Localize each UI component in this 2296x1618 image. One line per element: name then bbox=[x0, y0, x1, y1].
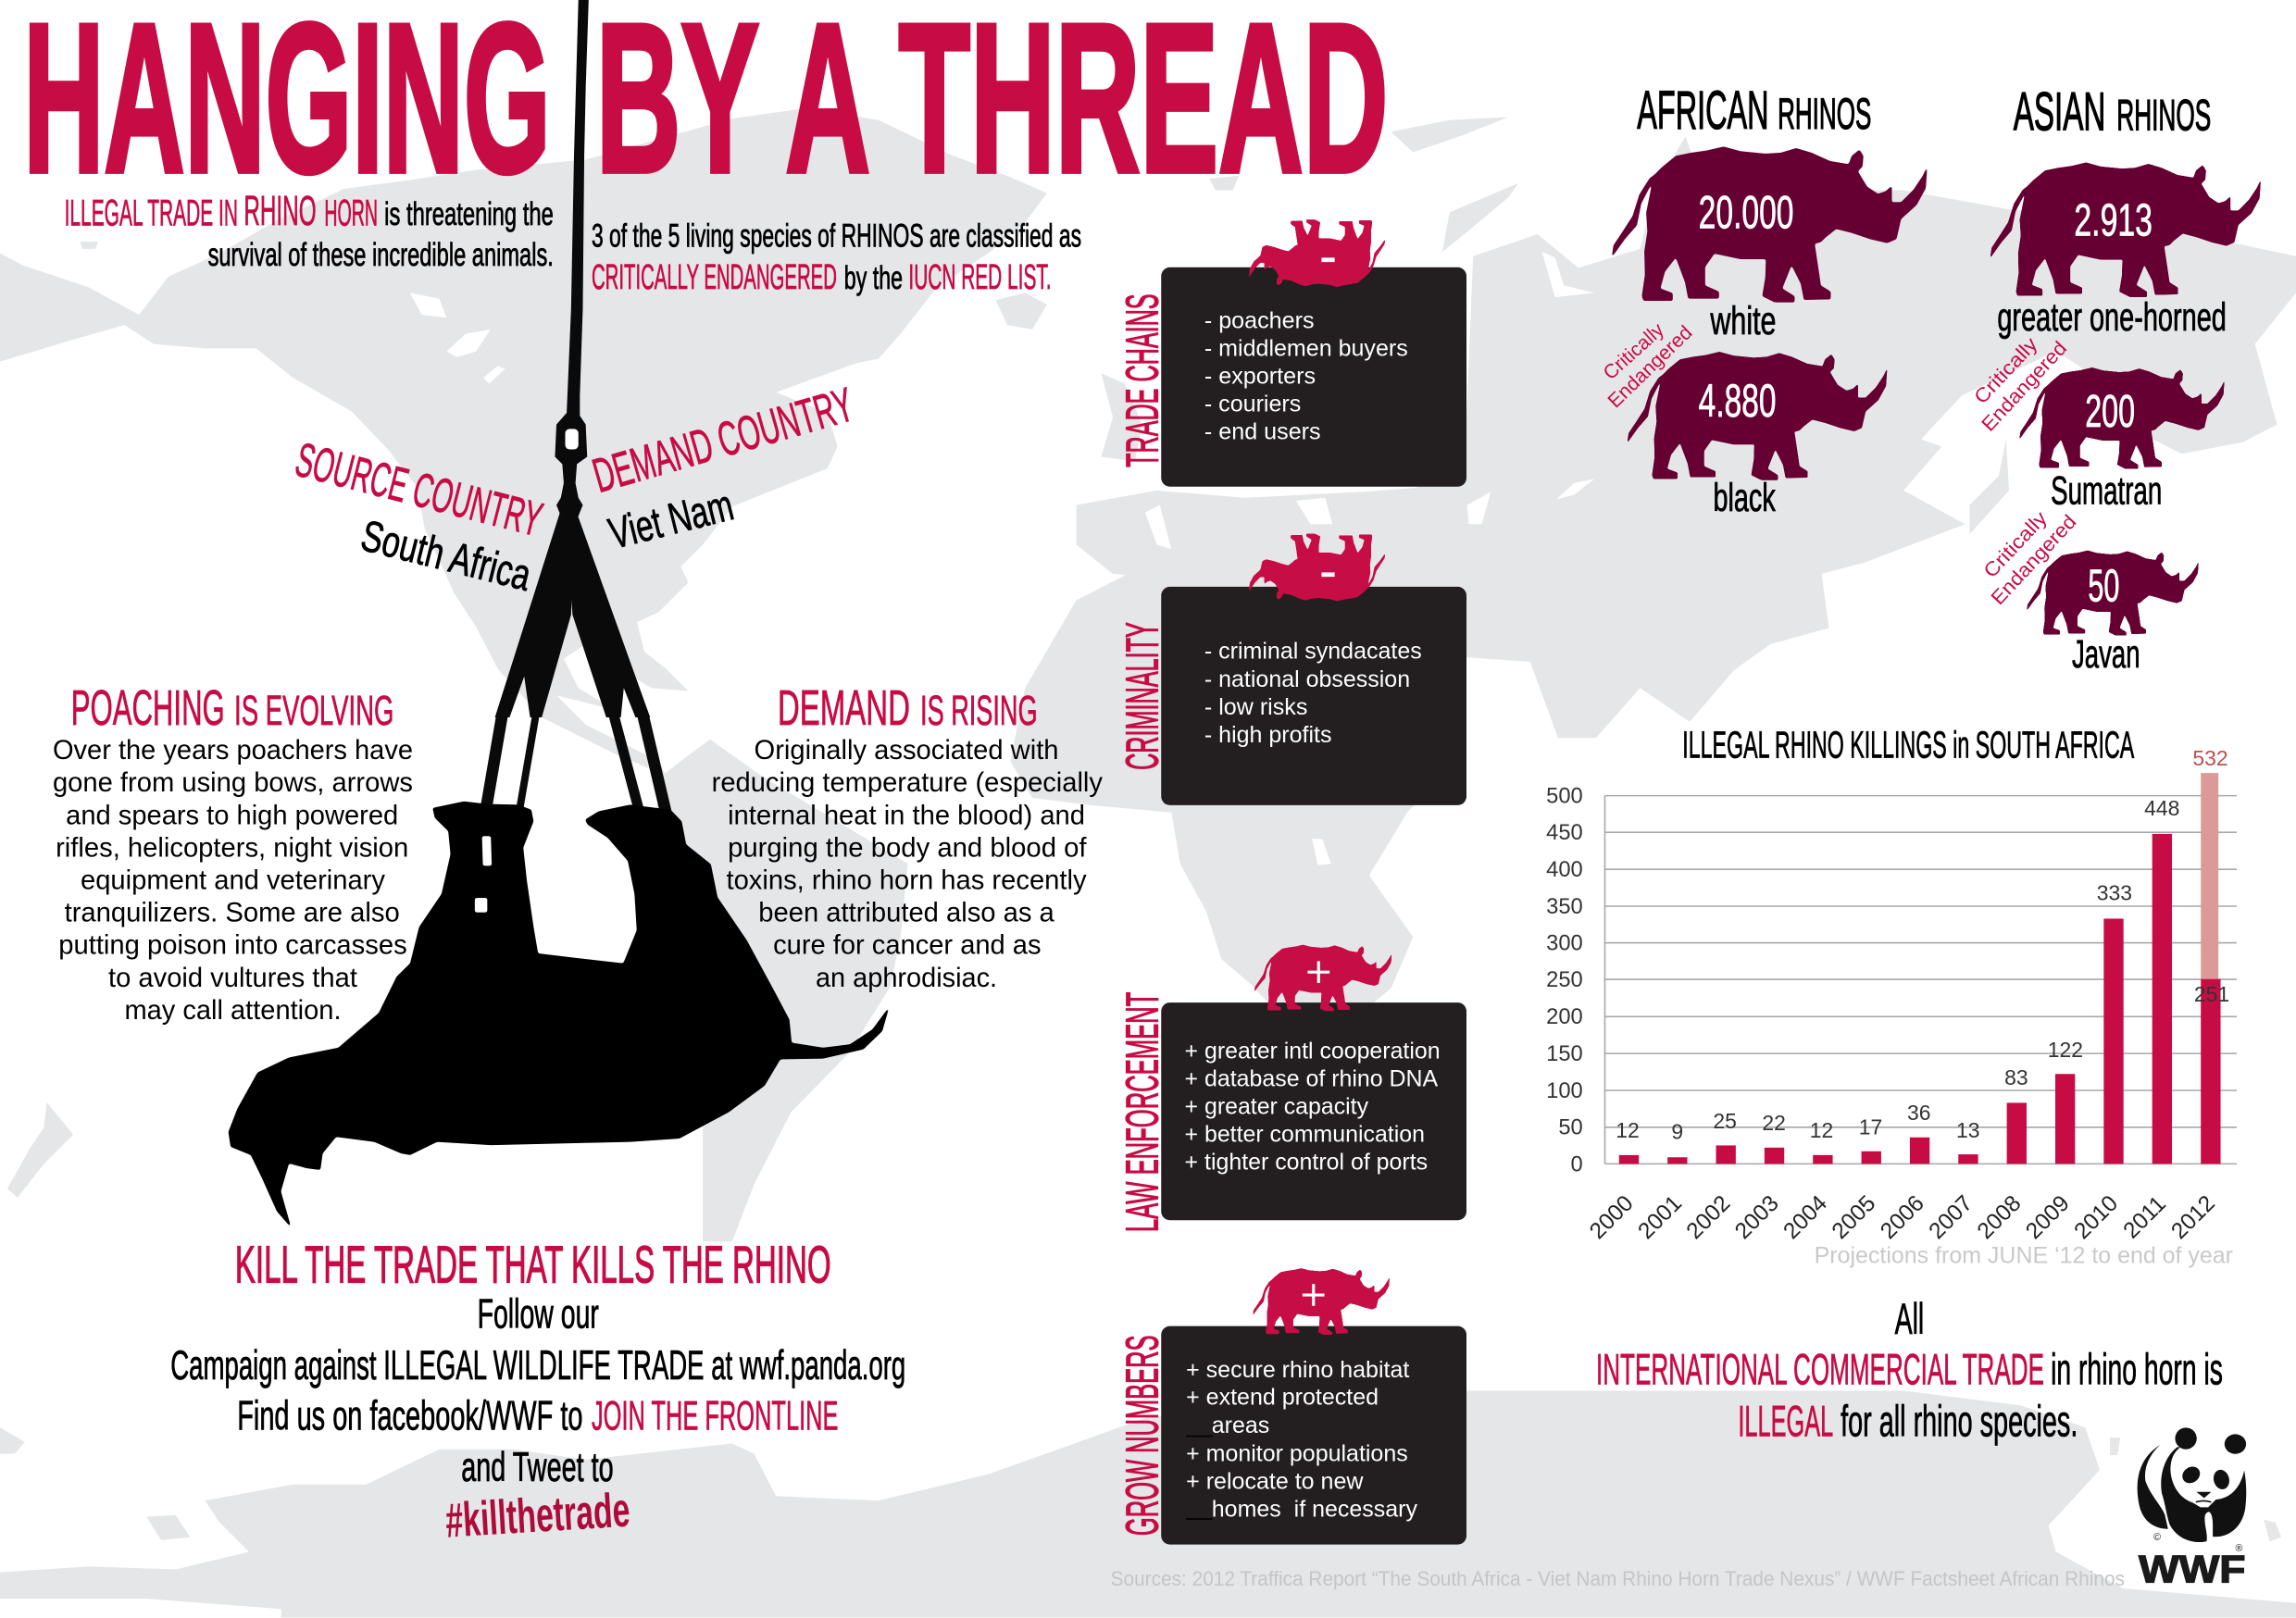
call to action: #killthetrade bbox=[444, 1484, 631, 1549]
bar chart: illegal rhino killings: 448 bbox=[2144, 796, 2179, 820]
asian rhinos: Javan bbox=[2072, 632, 2140, 677]
demand is rising: toxins, rhino horn has recently bbox=[726, 866, 1087, 896]
bar chart: illegal rhino killings: 9 bbox=[1671, 1119, 1683, 1143]
panel: criminality: - high profits bbox=[1204, 723, 1331, 748]
statement: commercial trade illegal bbox=[1596, 1295, 2223, 1446]
bar chart: illegal rhino killings: 500 bbox=[1546, 785, 1583, 809]
source country label: South Africa bbox=[356, 511, 536, 601]
panel: grow numbers: areas bbox=[1212, 1413, 1269, 1438]
bar chart: illegal rhino killings: 2004 bbox=[1778, 1191, 1832, 1244]
demand country label: DEMAND COUNTRY bbox=[587, 378, 859, 504]
rope and sling bbox=[486, 0, 667, 814]
panel: trade chains: - end users bbox=[1204, 419, 1321, 444]
african rhinos bbox=[1599, 81, 1928, 520]
panel: criminality bbox=[1118, 534, 1466, 805]
demand is rising: IS RISING bbox=[920, 686, 1038, 734]
bar chart: illegal rhino killings: 150 bbox=[1546, 1042, 1583, 1066]
poaching is evolving: tranquilizers. Some are also bbox=[65, 899, 400, 928]
call to action: and Tweet to bbox=[461, 1445, 614, 1490]
statement: commercial trade illegal: ILLEGAL bbox=[1738, 1397, 1833, 1446]
bar chart: illegal rhino killings: 2002 bbox=[1682, 1191, 1735, 1244]
demand is rising: purging the body and blood of bbox=[728, 833, 1087, 863]
bar chart: illegal rhino killings: 2008 bbox=[1973, 1191, 2026, 1244]
african rhinos: AFRICAN bbox=[1637, 81, 1769, 141]
WWF panda logo: WWF bbox=[2139, 1548, 2245, 1590]
sources: Sources: 2012 Traffica Report “The South Africa - Viet Nam Rhino Horn Trade Nexus” / WWF Factsheet African Rhinos bbox=[1111, 1567, 2125, 1590]
call to action: JOIN THE FRONTLINE bbox=[592, 1394, 838, 1439]
call to action: KILL THE TRADE THAT KILLS THE RHINO bbox=[235, 1235, 831, 1294]
panel: grow numbers: + secure rhino habitat bbox=[1186, 1358, 1410, 1383]
bar chart: illegal rhino killings: 2005 bbox=[1828, 1191, 1880, 1244]
african rhinos: Critically bbox=[1599, 318, 1668, 384]
poaching is evolving: Over the years poachers have bbox=[53, 736, 413, 765]
call to action bbox=[170, 1235, 905, 1549]
bar chart: illegal rhino killings: 100 bbox=[1546, 1079, 1583, 1103]
panel: grow numbers bbox=[1118, 1268, 1466, 1545]
bar chart: illegal rhino killings: 450 bbox=[1546, 821, 1583, 845]
bar chart: illegal rhino killings: 532 bbox=[2192, 746, 2228, 770]
intro text: critically endangered: CRITICALLY ENDANGERED bbox=[592, 258, 837, 297]
panel: grow numbers: + monitor populations bbox=[1186, 1441, 1408, 1466]
panel: criminality: - low risks bbox=[1204, 695, 1307, 720]
african rhinos: white bbox=[1710, 299, 1777, 343]
asian rhinos bbox=[1970, 82, 2261, 677]
poaching is evolving: IS EVOLVING bbox=[234, 686, 393, 734]
panel: trade chains: - exporters bbox=[1204, 364, 1316, 389]
statement: commercial trade illegal: All bbox=[1895, 1295, 1924, 1344]
bar chart: illegal rhino killings: 83 bbox=[2004, 1065, 2028, 1089]
panel: trade chains: - poachers bbox=[1204, 308, 1315, 333]
intro text: illegal trade: is threatening the bbox=[384, 197, 554, 232]
african rhinos: Endangered bbox=[1603, 321, 1696, 412]
african rhinos: 20.000 bbox=[1699, 186, 1794, 238]
panel: law enforcement: + greater intl cooperation bbox=[1185, 1039, 1441, 1064]
demand country label: Viet Nam bbox=[605, 480, 738, 559]
WWF panda logo bbox=[2138, 1427, 2246, 1590]
panel: law enforcement bbox=[1118, 945, 1466, 1232]
bar chart: illegal rhino killings: 12 bbox=[1616, 1118, 1640, 1142]
asian rhinos: ASIAN bbox=[2014, 82, 2105, 143]
intro text: illegal trade bbox=[65, 186, 554, 273]
bar chart: illegal rhino killings: 2000 bbox=[1585, 1191, 1639, 1244]
poaching is evolving: to avoid vultures that bbox=[108, 964, 357, 993]
bar chart: illegal rhino killings: 400 bbox=[1546, 858, 1583, 882]
WWF panda logo: ® bbox=[2235, 1543, 2242, 1554]
source country label: SOURCE COUNTRY bbox=[290, 433, 547, 547]
intro text: critically endangered bbox=[592, 219, 1081, 297]
bar chart: illegal rhino killings: 2007 bbox=[1924, 1191, 1978, 1244]
panel: trade chains: - middlemen buyers bbox=[1204, 336, 1408, 361]
demand is rising: internal heat in the blood) and bbox=[728, 801, 1085, 830]
bar chart: illegal rhino killings: 2012 bbox=[2166, 1191, 2220, 1244]
WWF panda logo: © bbox=[2153, 1532, 2161, 1543]
panel: trade chains: TRADE CHAINS bbox=[1118, 293, 1168, 467]
demand is rising bbox=[712, 680, 1103, 993]
panel: criminality: - criminal syndacates bbox=[1204, 640, 1422, 665]
hanging rhino silhouette bbox=[229, 802, 890, 1227]
bar chart: illegal rhino killings: 36 bbox=[1907, 1101, 1930, 1125]
demand is rising: cure for cancer and as bbox=[773, 931, 1042, 961]
panel: law enforcement: LAW ENFORCEMENT bbox=[1118, 992, 1168, 1232]
bar chart: illegal rhino killings: 333 bbox=[2097, 881, 2132, 905]
call to action: Follow our bbox=[478, 1292, 599, 1338]
call to action: Campaign against ILLEGAL WILDLIFE TRADE at wwf.panda.org bbox=[170, 1343, 905, 1388]
bar chart: illegal rhino killings: 12 bbox=[1810, 1118, 1833, 1142]
asian rhinos: Critically bbox=[1979, 507, 2052, 582]
bar chart: illegal rhino killings bbox=[1546, 723, 2237, 1269]
bar chart: illegal rhino killings: 2003 bbox=[1730, 1191, 1784, 1244]
intro text: illegal trade: ILLEGAL TRADE IN bbox=[65, 193, 238, 234]
intro text: illegal trade: RHINO bbox=[243, 186, 317, 234]
panel: grow numbers: + extend protected bbox=[1186, 1386, 1379, 1411]
demand is rising: been attributed also as a bbox=[758, 899, 1054, 928]
panel: trade chains bbox=[1118, 219, 1466, 487]
intro text: critically endangered: IUCN RED LIST. bbox=[908, 258, 1052, 297]
panel: law enforcement: + greater capacity bbox=[1185, 1095, 1369, 1120]
asian rhinos: Sumatran bbox=[2051, 469, 2162, 514]
bar chart: illegal rhino killings: 13 bbox=[1956, 1118, 1979, 1142]
statement: commercial trade illegal: for all rhino species. bbox=[1841, 1397, 2078, 1446]
demand is rising: Originally associated with bbox=[755, 736, 1059, 765]
bar chart: illegal rhino killings: Projections from JUNE ‘12 to end of year bbox=[1815, 1243, 2233, 1269]
panel: law enforcement: + database of rhino DNA bbox=[1185, 1067, 1439, 1092]
asian rhinos: RHINOS bbox=[2116, 92, 2211, 141]
poaching is evolving: putting poison into carcasses bbox=[58, 931, 407, 961]
bar chart: illegal rhino killings: 250 bbox=[1546, 968, 1583, 992]
panel: criminality: CRIMINALITY bbox=[1118, 622, 1168, 770]
panel: trade chains: - couriers bbox=[1204, 392, 1301, 417]
bar chart: illegal rhino killings: 17 bbox=[1859, 1115, 1882, 1139]
bar chart: illegal rhino killings: 2011 bbox=[2119, 1191, 2171, 1244]
bar chart: illegal rhino killings: 251 bbox=[2194, 982, 2229, 1006]
asian rhinos: 2.913 bbox=[2074, 196, 2152, 246]
bar chart: illegal rhino killings: 300 bbox=[1546, 931, 1583, 955]
asian rhinos: Endangered bbox=[1978, 337, 2071, 436]
bar chart: illegal rhino killings: 122 bbox=[2048, 1038, 2083, 1062]
african rhinos: 4.880 bbox=[1699, 375, 1777, 427]
bar chart: illegal rhino killings: 2006 bbox=[1876, 1191, 1929, 1244]
panel: law enforcement: + tighter control of ports bbox=[1185, 1151, 1428, 1176]
asian rhinos: Critically bbox=[1970, 333, 2042, 408]
panel: law enforcement: + better communication bbox=[1185, 1123, 1425, 1148]
asian rhinos: Endangered bbox=[1987, 511, 2081, 609]
poaching is evolving: rifles, helicopters, night vision bbox=[56, 833, 408, 863]
intro text: critically endangered: 3 of the 5 living species of RHINOS are classified as bbox=[592, 219, 1081, 255]
map white lakes and channels bbox=[410, 252, 1594, 984]
panel: grow numbers: + relocate to new bbox=[1186, 1470, 1364, 1495]
panel: criminality: - national obsession bbox=[1204, 667, 1410, 692]
poaching is evolving: and spears to high powered bbox=[66, 801, 398, 830]
poaching is evolving: equipment and veterinary bbox=[81, 866, 385, 896]
african rhinos: black bbox=[1714, 476, 1776, 520]
poaching is evolving: POACHING bbox=[71, 680, 225, 736]
bar chart: illegal rhino killings: 2010 bbox=[2070, 1191, 2123, 1244]
source country label bbox=[290, 433, 547, 601]
poaching is evolving: may call attention. bbox=[124, 996, 342, 1026]
panel: grow numbers: homes if necessary bbox=[1212, 1498, 1418, 1523]
demand is rising: DEMAND bbox=[778, 680, 910, 736]
bar chart: illegal rhino killings: 50 bbox=[1558, 1116, 1583, 1140]
demand country label bbox=[587, 378, 859, 559]
asian rhinos: 50 bbox=[2088, 561, 2119, 611]
demand is rising: reducing temperature (especially bbox=[712, 768, 1103, 798]
intro text: critically endangered: by the bbox=[844, 261, 903, 296]
panel: grow numbers: GROW NUMBERS bbox=[1118, 1335, 1168, 1536]
bar chart: illegal rhino killings: 200 bbox=[1546, 1005, 1583, 1029]
intro text: illegal trade: survival of these incredible animals. bbox=[208, 238, 554, 273]
poaching is evolving bbox=[53, 680, 413, 1026]
poaching is evolving: gone from using bows, arrows bbox=[53, 768, 413, 798]
bar chart: illegal rhino killings: 0 bbox=[1571, 1152, 1583, 1176]
intro text: illegal trade: HORN bbox=[324, 193, 378, 234]
bar chart: illegal rhino killings: 22 bbox=[1762, 1111, 1786, 1135]
demand is rising: an aphrodisiac. bbox=[816, 964, 997, 993]
bar chart: illegal rhino killings: 25 bbox=[1713, 1109, 1737, 1133]
asian rhinos: 200 bbox=[2085, 387, 2135, 437]
bar chart: illegal rhino killings: 2001 bbox=[1633, 1191, 1687, 1244]
bar chart: illegal rhino killings: 350 bbox=[1546, 895, 1583, 919]
bar chart: illegal rhino killings: 2009 bbox=[2021, 1191, 2075, 1244]
call to action: Find us on facebook/WWF to bbox=[237, 1394, 582, 1439]
african rhinos: RHINOS bbox=[1778, 90, 1871, 139]
